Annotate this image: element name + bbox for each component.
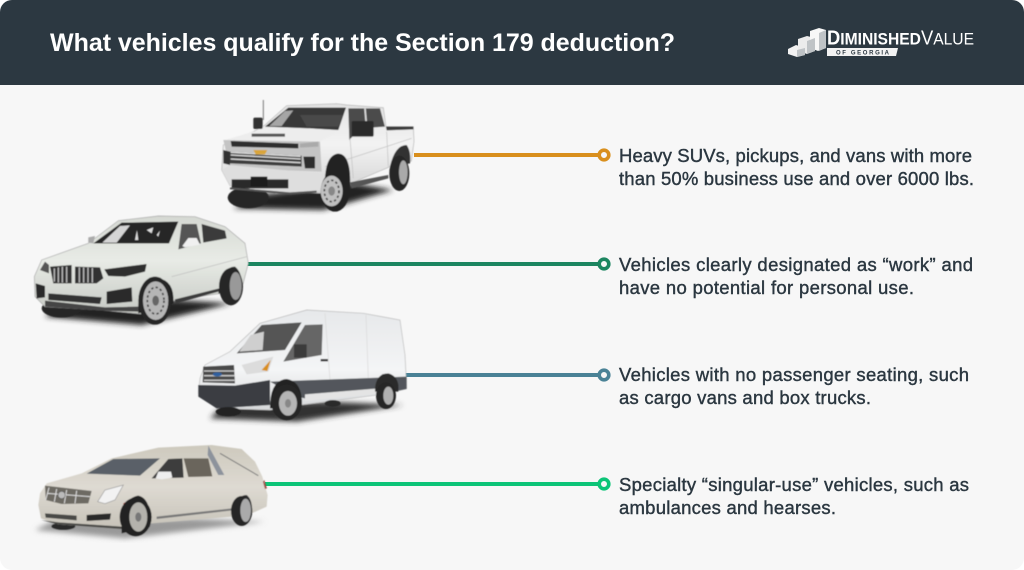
logo tagline bbox=[827, 48, 898, 56]
logo wordmark: DIMINISHEDVALUE bbox=[827, 28, 974, 50]
text block: work vehicles: have no potential for personal use. bbox=[619, 277, 914, 298]
vehicle: champagne hearse bbox=[35, 445, 268, 538]
title: What vehicles qualify for the Section 179 deduction? bbox=[50, 29, 675, 57]
text block: heavy vehicles: Heavy SUVs, pickups, and vans with more bbox=[619, 145, 972, 166]
header bar bbox=[0, 0, 1024, 85]
text block: no passenger seating: Vehicles with no passenger seating, such bbox=[619, 364, 969, 385]
text block: work vehicles: Vehicles clearly designated as “work” and bbox=[619, 254, 973, 275]
logo: Diminished Value of Georgia bbox=[788, 28, 974, 57]
text block: no passenger seating: as cargo vans and box trucks. bbox=[619, 387, 871, 408]
connector: bright green line and dot bbox=[265, 479, 609, 489]
text block: specialty vehicles: ambulances and hearses. bbox=[619, 497, 836, 518]
vehicle: white cargo van bbox=[198, 310, 407, 422]
vehicle: white pickup truck bbox=[222, 100, 414, 212]
vehicle: white BMW SUV bbox=[34, 216, 248, 325]
connector: blue line and dot bbox=[405, 370, 609, 380]
connector: dark green line and dot bbox=[247, 259, 609, 269]
connector: orange line and dot bbox=[414, 150, 609, 160]
text block: specialty vehicles: Specialty “singular-use” vehicles, such as bbox=[619, 474, 969, 495]
logo tagline: OF GEORGIA bbox=[836, 50, 890, 56]
icon: stair blocks bbox=[788, 28, 826, 57]
text block: heavy vehicles: than 50% business use and over 6000 lbs. bbox=[619, 168, 974, 189]
